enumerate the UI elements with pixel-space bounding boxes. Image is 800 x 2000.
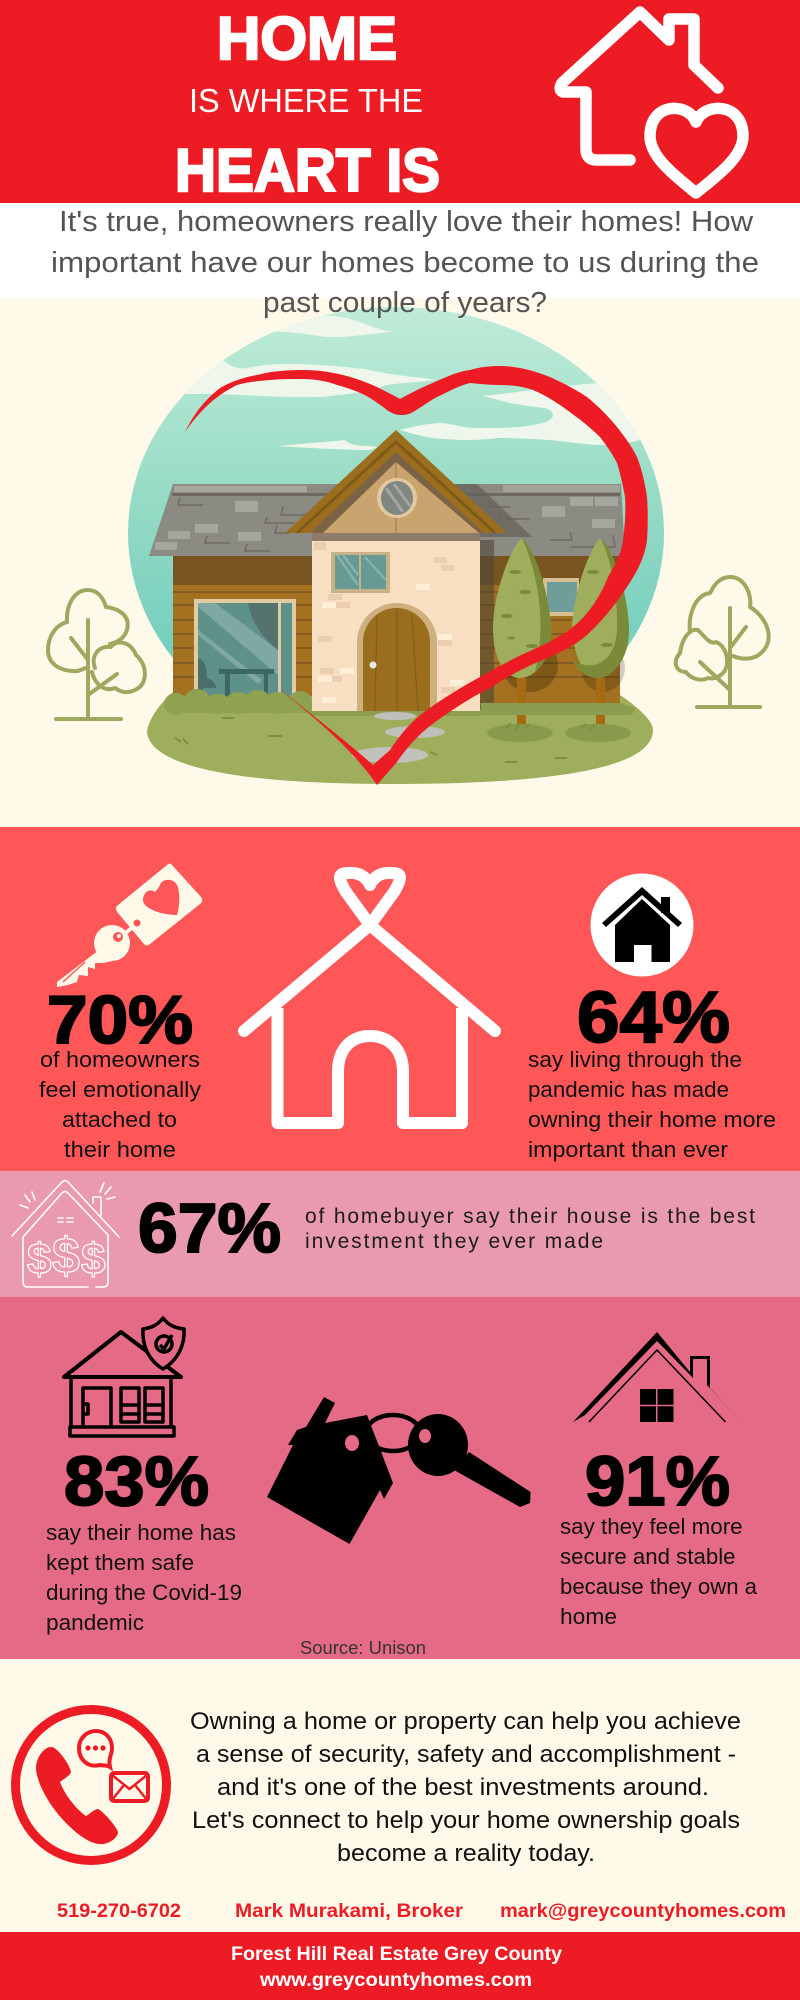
text: contact details: mark@greycountyhomes.com	[500, 1900, 786, 1922]
text: call to action: become a reality today.	[337, 1840, 595, 1867]
panel: pink stat band	[0, 1171, 800, 1297]
text: 67% caption	[305, 1205, 755, 1253]
icon: house with dollars: $	[27, 1235, 51, 1284]
red heart outline	[185, 366, 648, 785]
patio window	[194, 599, 296, 700]
text: source: Source: Unison	[300, 1637, 426, 1658]
text: 70% caption: of homeowners	[40, 1047, 200, 1072]
panel: header	[0, 0, 800, 204]
tree shadows	[502, 638, 558, 692]
text: 70% caption: attached to	[62, 1107, 177, 1132]
grass mounds	[487, 724, 553, 742]
icon: roof outline house	[573, 1332, 741, 1422]
bushes	[164, 689, 312, 715]
wooden walls	[173, 556, 312, 696]
text: 91% caption	[560, 1514, 758, 1629]
text: 67% caption: of homebuyer say their house is the best	[305, 1205, 755, 1228]
icon: outline tree left	[48, 590, 145, 719]
stat: 64%: 64%	[577, 978, 730, 1058]
text: 91% caption: secure and stable	[560, 1544, 736, 1569]
icon: house with heart	[560, 12, 743, 193]
panel: intro band	[0, 203, 800, 299]
text: call to action	[190, 1708, 741, 1867]
gable	[285, 430, 507, 533]
text: intro paragraph: It's true, homeowners really love their homes! How	[59, 206, 754, 238]
clouds	[170, 315, 650, 450]
illustration: house scene	[128, 307, 664, 785]
text: 83% caption: kept them safe	[46, 1550, 194, 1575]
tower	[312, 533, 480, 541]
stones	[374, 712, 416, 720]
text: intro paragraph: important have our homes become to us during the	[51, 247, 759, 279]
text: 64% caption: say living through the	[528, 1047, 742, 1072]
right window	[543, 578, 579, 616]
text: contact details: 519-270-6702	[57, 1900, 181, 1922]
stat: 70%: 70%	[47, 982, 193, 1058]
text: 67% caption: investment they ever made	[305, 1230, 603, 1253]
text: contact details	[57, 1900, 786, 1922]
trees	[517, 678, 526, 727]
panel: illustration background	[0, 298, 800, 827]
panel: footer	[0, 1932, 800, 2000]
text: 64% caption: owning their home more	[528, 1107, 776, 1132]
text: 70% caption: their home	[64, 1137, 176, 1162]
door	[357, 603, 437, 712]
icon: outline tree right	[676, 577, 769, 707]
stat: 83%: 83%	[64, 1442, 209, 1520]
panel: contact	[0, 1659, 800, 1932]
text: 83% caption: say their home has	[46, 1520, 236, 1545]
title: is where the: IS WHERE THE	[189, 82, 423, 119]
text: call to action: and it's one of the best investments around.	[217, 1774, 709, 1801]
text: 83% caption: during the Covid-19	[46, 1580, 242, 1605]
text: company name: Forest Hill Real Estate Grey County	[231, 1944, 562, 1965]
text: call to action: Owning a home or property can help you achieve	[190, 1708, 741, 1735]
icon: house with dollars	[12, 1180, 119, 1287]
text: website: www.greycountyhomes.com	[259, 1970, 532, 1991]
icon: key with heart tag	[57, 864, 202, 987]
stat: 91%: 91%	[585, 1442, 730, 1520]
icon: white circle house	[590, 874, 694, 976]
ground shadow band	[311, 711, 481, 716]
text: 70% caption: feel emotionally	[39, 1077, 201, 1102]
grass tufts	[175, 718, 595, 762]
text: 64% caption: pandemic has made	[528, 1077, 729, 1102]
icon: phone circle	[16, 1710, 166, 1860]
icon: house with dollars: $	[52, 1228, 80, 1284]
icon: house with dollars: $	[81, 1235, 105, 1284]
tower window	[331, 552, 390, 593]
text: 70% caption	[39, 1047, 201, 1162]
text: intro paragraph: past couple of years?	[263, 287, 547, 319]
text: 91% caption: home	[560, 1604, 617, 1629]
text: contact details: Mark Murakami, Broker	[235, 1900, 463, 1922]
ground	[147, 692, 653, 784]
icon: house with heart roof	[244, 873, 495, 1123]
text: call to action: a sense of security, safety and accomplishment -	[196, 1741, 736, 1768]
title: heart is: HEART IS	[175, 137, 440, 204]
text: 64% caption	[528, 1047, 776, 1162]
icon: black house keychain	[267, 1397, 531, 1544]
text: call to action: Let's connect to help your home ownership goals	[192, 1807, 740, 1834]
text: 83% caption: pandemic	[46, 1610, 144, 1635]
roof	[149, 484, 625, 556]
panel: coral stats	[0, 827, 800, 1171]
icon: house with shield	[64, 1318, 184, 1436]
stat: 67%: 67%	[138, 1189, 281, 1267]
sky oval	[128, 307, 664, 759]
panel: rose stats	[0, 1297, 800, 1659]
text: 83% caption	[46, 1520, 242, 1635]
text: 64% caption: important than ever	[528, 1137, 728, 1162]
text: 91% caption: say they feel more	[560, 1514, 743, 1539]
text: 91% caption: because they own a	[560, 1574, 758, 1599]
title: home: HOME	[217, 5, 397, 72]
text: intro paragraph	[51, 206, 759, 319]
